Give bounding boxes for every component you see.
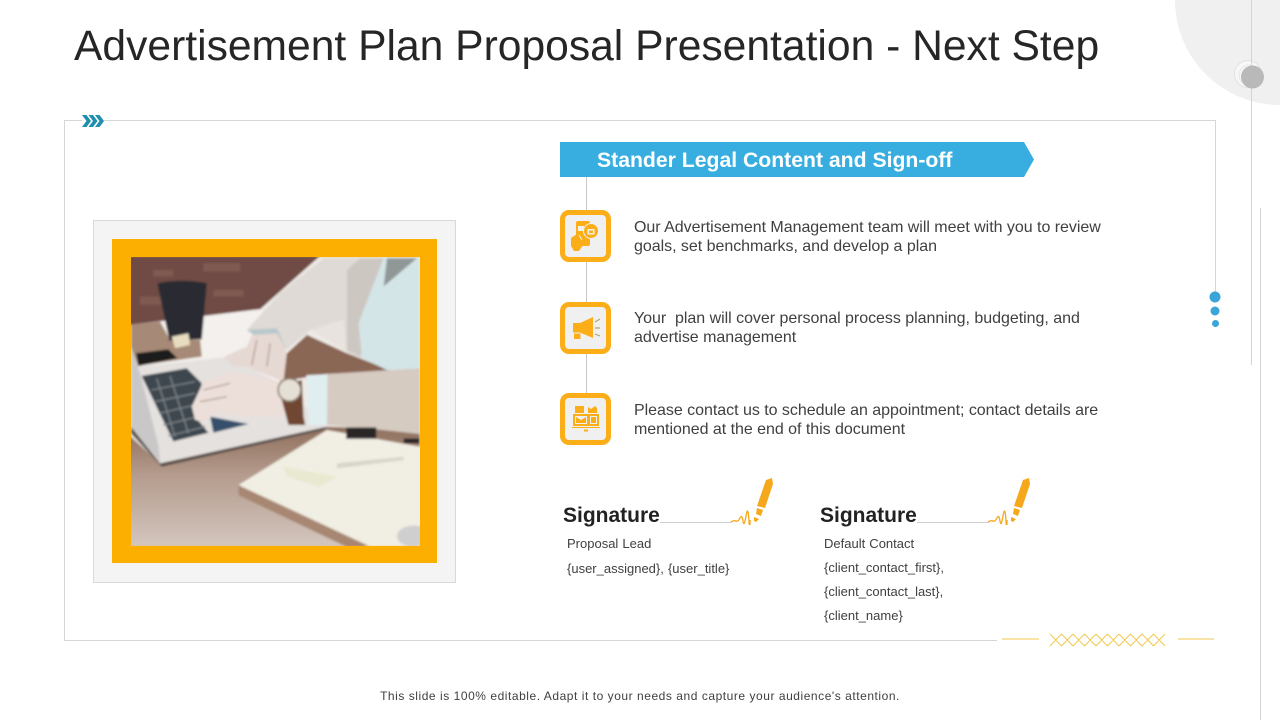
icon: pen and signature line (917, 478, 1030, 525)
content frame (64, 120, 1216, 641)
photo panel (93, 220, 456, 583)
title: Advertisement Plan Proposal Presentation - Next Step (74, 22, 1099, 70)
hands (224, 332, 287, 382)
desk (152, 308, 258, 322)
text block: review goals (634, 219, 1101, 255)
decorative cross pattern divider (1002, 634, 1214, 646)
icon: phone with shopping bag (560, 210, 611, 262)
signer details: Default Contact (824, 536, 914, 551)
text block: review goals: Our Advertisement Management team will meet with you to review (634, 219, 1101, 236)
icon: megaphone (560, 302, 611, 354)
signature block: proposal lead (563, 478, 773, 576)
signer details: Proposal Lead (567, 536, 651, 551)
text block: plan coverage (634, 310, 1080, 346)
signature heading: Signature (820, 504, 917, 527)
section banner (560, 142, 1034, 177)
text block: review goals: goals, set benchmarks, and develop a plan (634, 238, 937, 255)
signature block: default contact: {client_contact_first}, (824, 560, 944, 575)
footer note: This slide is 100% editable. Adapt it to your needs and capture your audience's attention. (380, 689, 900, 703)
signature block: proposal lead: {user_assigned}, {user_title} (567, 561, 729, 576)
laptop (134, 353, 322, 461)
vertical timeline connector (586, 177, 587, 397)
cup (157, 281, 207, 341)
text block: contact us: Please contact us to schedule an appointment; contact details are (634, 402, 1098, 419)
icon: computer with media (560, 393, 611, 445)
notebook (238, 430, 420, 550)
text block: plan coverage: Your plan will cover personal process planning, budgeting, and (634, 310, 1080, 327)
section banner: Stander Legal Content and Sign-off (597, 149, 953, 172)
text block: contact us (634, 402, 1098, 438)
signature block: default contact: {client_name} (824, 608, 903, 623)
watch (279, 380, 305, 425)
sweater and shirt (248, 258, 361, 358)
icon: pen and signature line (660, 478, 773, 525)
signature heading: Signature (563, 504, 660, 527)
pagination dots (1210, 292, 1220, 327)
signature block: default contact: {client_contact_last}, (824, 584, 943, 599)
text block: contact us: mentioned at the end of this document (634, 421, 905, 438)
signature block: default contact (820, 478, 1030, 623)
icon: chevrons (82, 115, 104, 127)
orange photo frame (112, 239, 437, 563)
text block: plan coverage: advertise management (634, 329, 796, 346)
brick wall (131, 257, 320, 326)
photo: hands typing on a laptop (131, 257, 420, 546)
